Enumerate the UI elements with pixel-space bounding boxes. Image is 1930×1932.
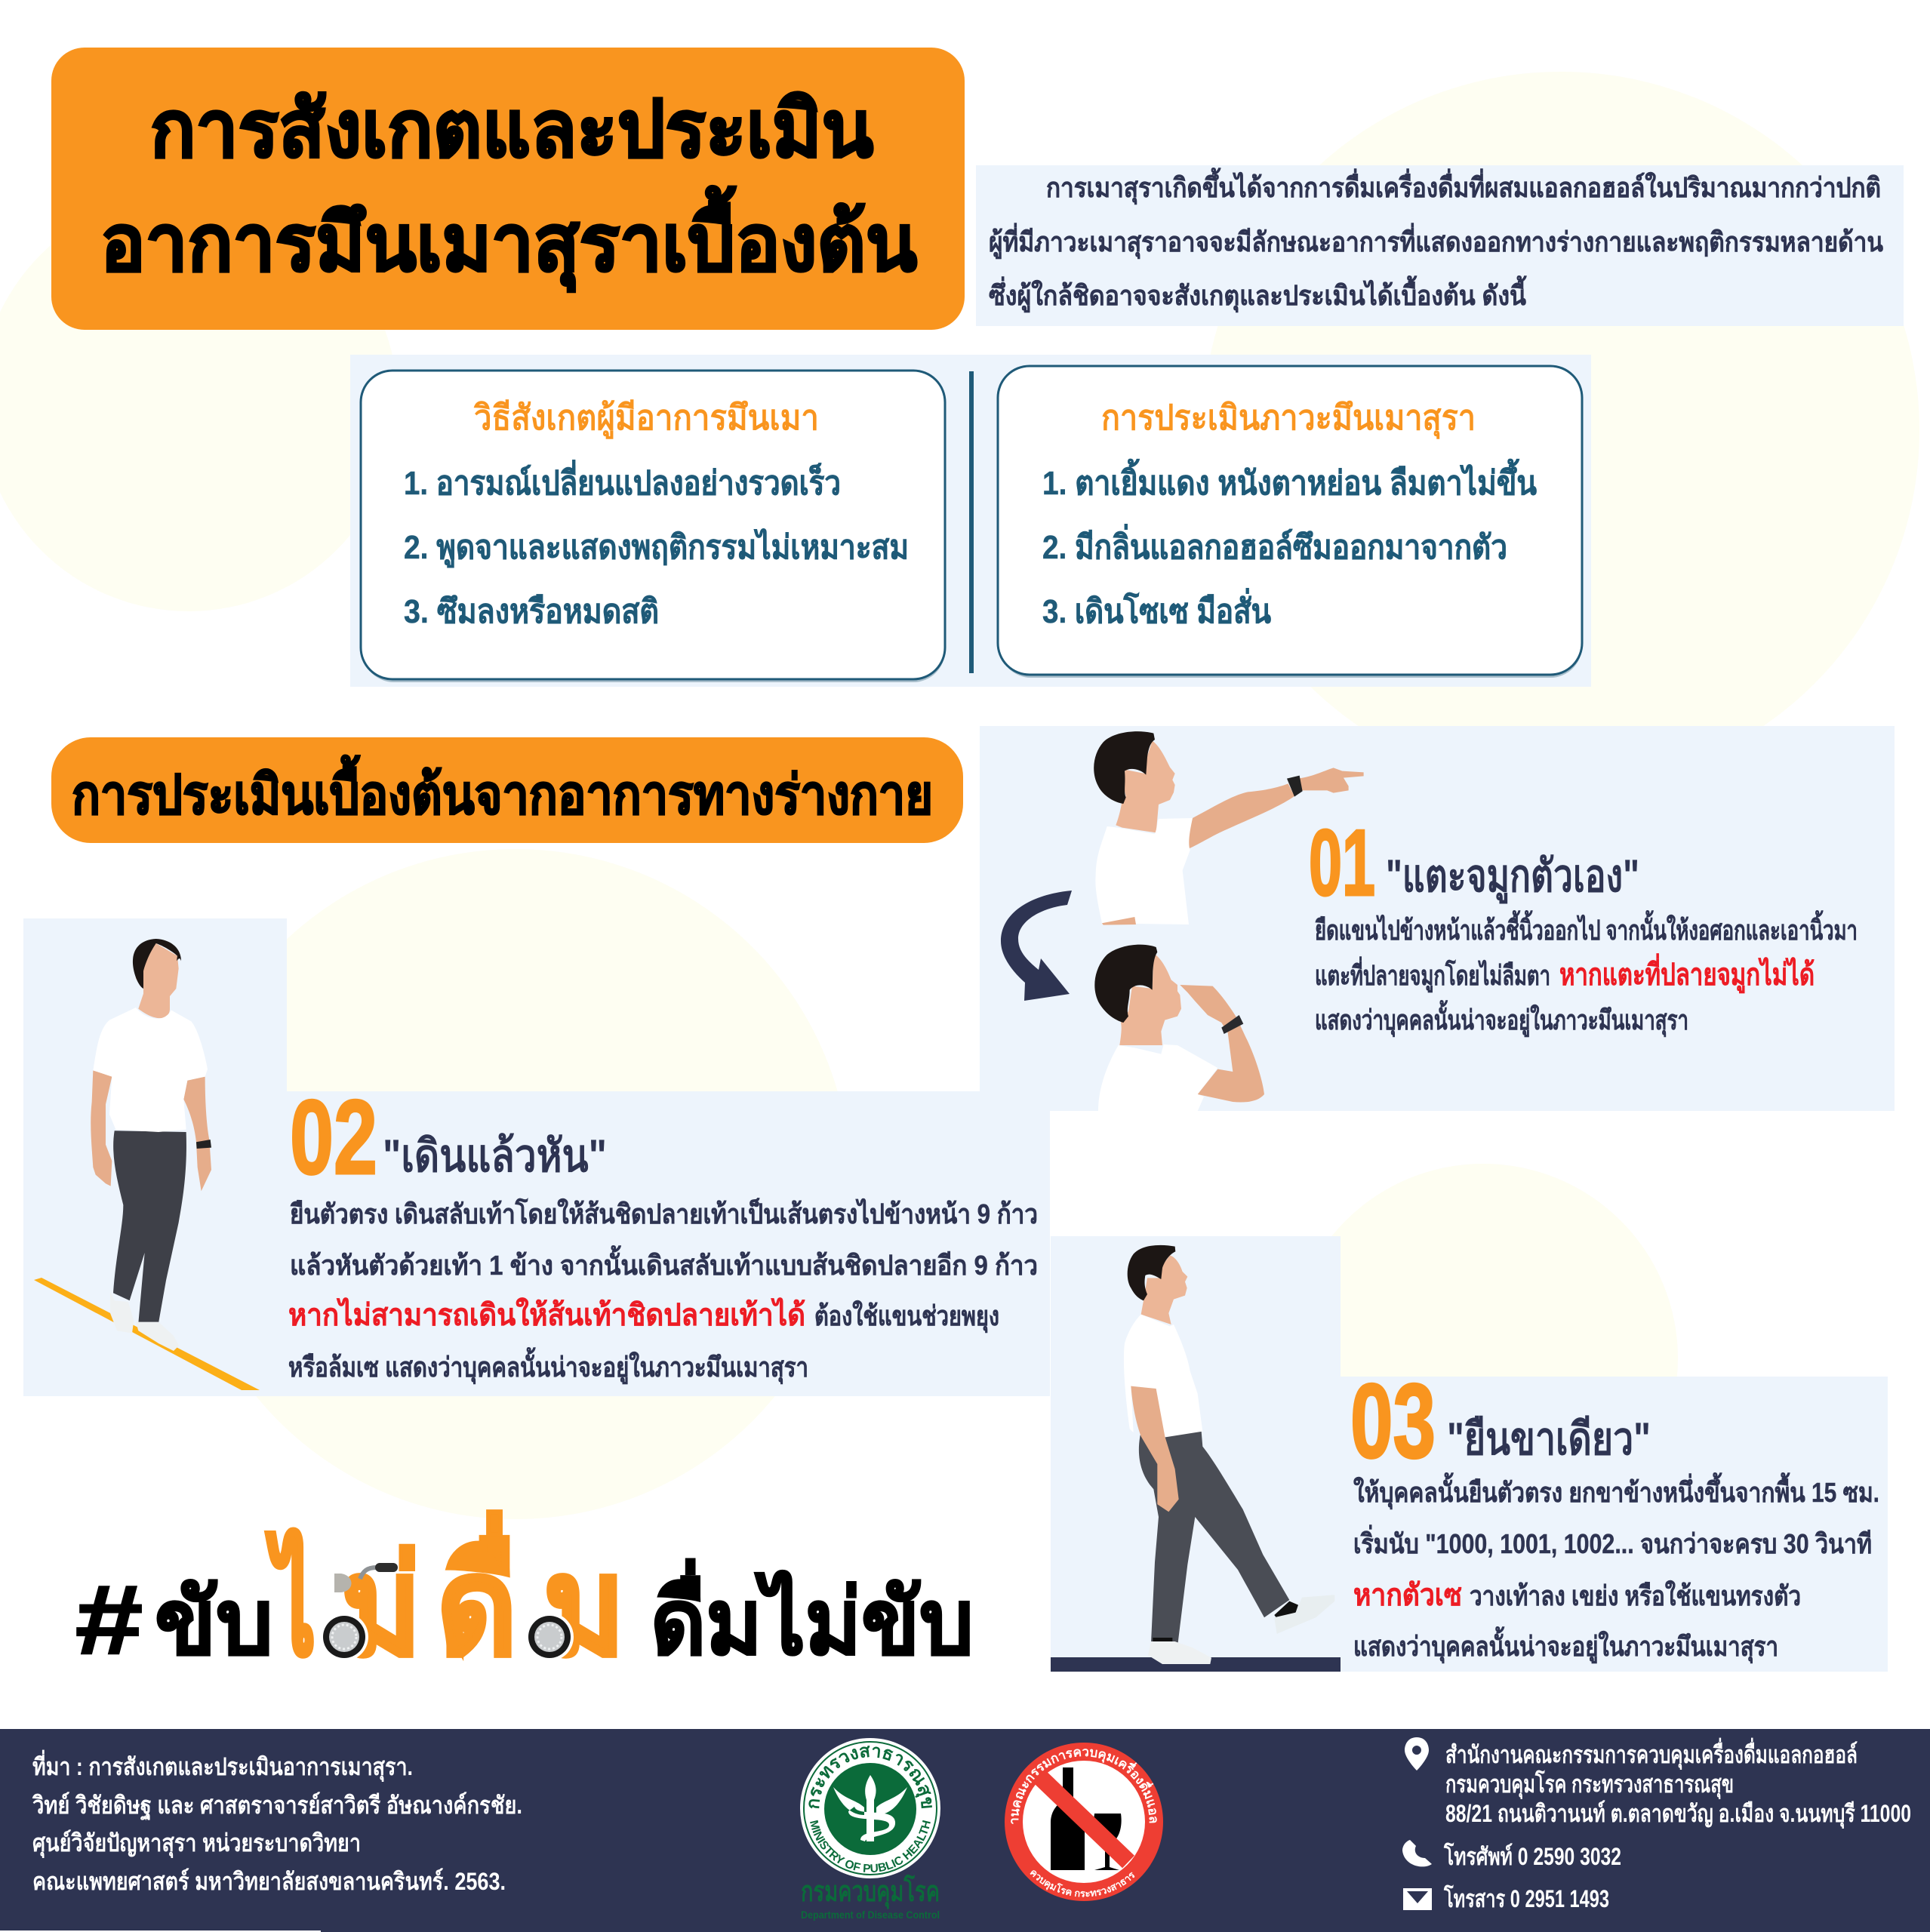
figure: man walking on line	[91, 939, 211, 1351]
logo: ministry of public health: กระทรวงสาธารณสุข	[808, 1746, 932, 1808]
card: intoxication assessment	[998, 366, 1582, 678]
arrow: curved downward	[1001, 891, 1072, 1001]
card: intoxication assessment: 3. เดินโซเซ มือสั่น	[1042, 588, 1271, 630]
test 02 description: หากไม่สามารถเดินให้ส้นเท้าชิดปลายเท้าได้	[288, 1297, 805, 1332]
test 01 description	[1315, 910, 1858, 1038]
test 03 heading: 03	[1350, 1361, 1436, 1480]
slogan: ไ	[266, 1529, 316, 1683]
panel: introduction	[976, 165, 1904, 326]
test 02 description: ยืนตัวตรง เดินสลับเท้าโดยให้ส้นชิดปลายเท้าเป็นเส้นตรงไปข้างหน้า 9 ก้าว	[290, 1197, 1038, 1229]
slogan	[75, 1512, 974, 1683]
card: intoxication assessment: 1. ตาเยิ้มแดง หนังตาหย่อน ลืมตาไม่ขึ้น	[1042, 458, 1537, 502]
panel: introduction: ซึ่งผู้ใกล้ชิดอาจจะสังเกตุและประเมินได้เบื้องต้น ดังนี้	[989, 275, 1527, 313]
test 03 description: วางเท้าลง เขย่ง หรือใช้แขนทรงตัว	[1470, 1580, 1801, 1611]
card: observation signs: วิธีสังเกตผู้มีอาการมึนเมา	[473, 398, 819, 439]
slogan: ขับ	[155, 1572, 273, 1673]
contact: telephone	[1402, 1840, 1621, 1870]
test 03 heading	[1350, 1361, 1651, 1480]
test 03 description	[1353, 1472, 1879, 1664]
icon: phone	[1402, 1840, 1432, 1866]
test 01 heading: "แตะจมูกตัวเอง"	[1386, 851, 1639, 904]
title text: อาการมึนเมาสุราเบื้องต้น	[100, 186, 917, 292]
title text: การสังเกตและประเมิน	[150, 86, 873, 174]
test 02 heading: "เดินแล้วหัน"	[383, 1131, 607, 1181]
card: intoxication assessment: 2. มีกลิ่นแอลกอฮอล์ซึมออกมาจากตัว	[1042, 524, 1507, 566]
slogan: ม่	[341, 1531, 421, 1683]
figure: man standing on one leg	[1124, 1245, 1334, 1664]
test 01 heading	[1309, 811, 1639, 915]
slogan: ดื่	[437, 1512, 517, 1683]
slogan: #	[75, 1564, 143, 1675]
logo: no alcohol sign	[1005, 1743, 1163, 1901]
contact: address	[1405, 1737, 1911, 1829]
figure: man touching nose	[1094, 945, 1264, 1111]
test 03 description: หากตัวเซ	[1353, 1579, 1462, 1612]
logo: no alcohol sign: สำนักงานคณะกรรมการควบคุมเครื่องดื่มแอลกอฮอล์	[1011, 1749, 1157, 1825]
title text	[100, 86, 917, 292]
source text: ที่มา : การสังเกตและประเมินอาการเมาสุรา.	[32, 1749, 413, 1783]
panel: observation and assessment cards	[350, 355, 1591, 687]
panel: test 03 stand on one leg	[1051, 1236, 1888, 1672]
section heading	[51, 737, 963, 843]
logo: ministry of public health: MINISTRY OF PUBLIC HEALTH	[810, 1820, 931, 1872]
test 03 description: แสดงว่าบุคคลนั้นน่าจะอยู่ในภาวะมึนเมาสุรา	[1353, 1626, 1778, 1664]
source text: วิทย์ วิชัยดิษฐ และ ศาสตราจารย์สาวิตรี อัษณางค์กรชัย.	[32, 1792, 522, 1821]
panel: test 01 touch nose	[980, 726, 1895, 1111]
test 01 description: แตะที่ปลายจมูกโดยไม่ลืมตา	[1315, 956, 1550, 993]
contact: fax: โทรสาร 0 2951 1493	[1443, 1884, 1609, 1912]
card: observation signs: 2. พูดจาและแสดงพฤติกรรมไม่เหมาะสม	[404, 528, 909, 568]
card: observation signs	[361, 371, 945, 682]
source text: ศุนย์วิจัยปัญหาสุรา หน่วยระบาดวิทยา	[32, 1829, 361, 1859]
section heading: การประเมินเบื้องต้นจากอาการทางร่างกาย	[72, 755, 933, 826]
test 03 heading: "ยืนขาเดียว"	[1447, 1414, 1651, 1464]
contact: telephone: โทรศัพท์ 0 2590 3032	[1443, 1842, 1621, 1870]
panel: test 02 walk and turn	[23, 918, 1050, 1396]
source text	[32, 1749, 522, 1895]
figure: man pointing	[1094, 731, 1364, 925]
test 02 heading	[290, 1078, 607, 1196]
logo: ministry of public health: Department of Disease Control	[801, 1909, 940, 1921]
test 01 description: แสดงว่าบุคคลนั้นน่าจะอยู่ในภาวะมึนเมาสุรา	[1315, 1000, 1688, 1038]
test 02 description: แล้วหันตัวด้วยเท้า 1 ข้าง จากนั้นเดินสลับเท้าแบบส้นชิดปลายอีก 9 ก้าว	[290, 1245, 1038, 1281]
slogan: ดื่มไม่ขับ	[651, 1558, 974, 1673]
logo: ministry of public health	[800, 1738, 940, 1921]
slogan: ม	[543, 1531, 625, 1683]
logo: ministry of public health: กรมควบคุมโรค	[801, 1874, 940, 1909]
test 02 description	[288, 1197, 1038, 1385]
card: intoxication assessment: การประเมินภาวะมึนเมาสุรา	[1101, 398, 1476, 439]
test 01 heading: 01	[1309, 811, 1375, 915]
test 02 heading: 02	[290, 1078, 377, 1196]
icon: location pin	[1405, 1737, 1429, 1770]
test 02 description: หรือล้มเซ แสดงว่าบุคคลนั้นน่าจะอยู่ในภาวะมึนเมาสุรา	[288, 1347, 808, 1385]
icon: envelope	[1403, 1888, 1432, 1910]
source text: คณะแพทยศาสตร์ มหาวิทยาลัยสงขลานครินทร์. 2563.	[32, 1868, 506, 1895]
title banner	[51, 48, 965, 330]
logo: no alcohol sign: กรมควบคุมโรค กระทรวงสาธารณสุข	[1030, 1870, 1135, 1897]
test 02 description: ต้องใช้แขนช่วยพยุง	[814, 1300, 999, 1334]
contact: fax	[1403, 1884, 1609, 1912]
icon: motorcycle wheels and handlebar	[320, 1563, 574, 1661]
card: observation signs: 3. ซึมลงหรือหมดสติ	[404, 593, 659, 630]
card: observation signs: 1. อารมณ์เปลี่ยนแปลงอย่างรวดเร็ว	[404, 460, 841, 502]
test 01 description: หากแตะที่ปลายจมูกไม่ได้	[1559, 953, 1815, 993]
contact: address: กรมควบคุมโรค กระทรวงสาธารณสุข	[1445, 1770, 1734, 1800]
